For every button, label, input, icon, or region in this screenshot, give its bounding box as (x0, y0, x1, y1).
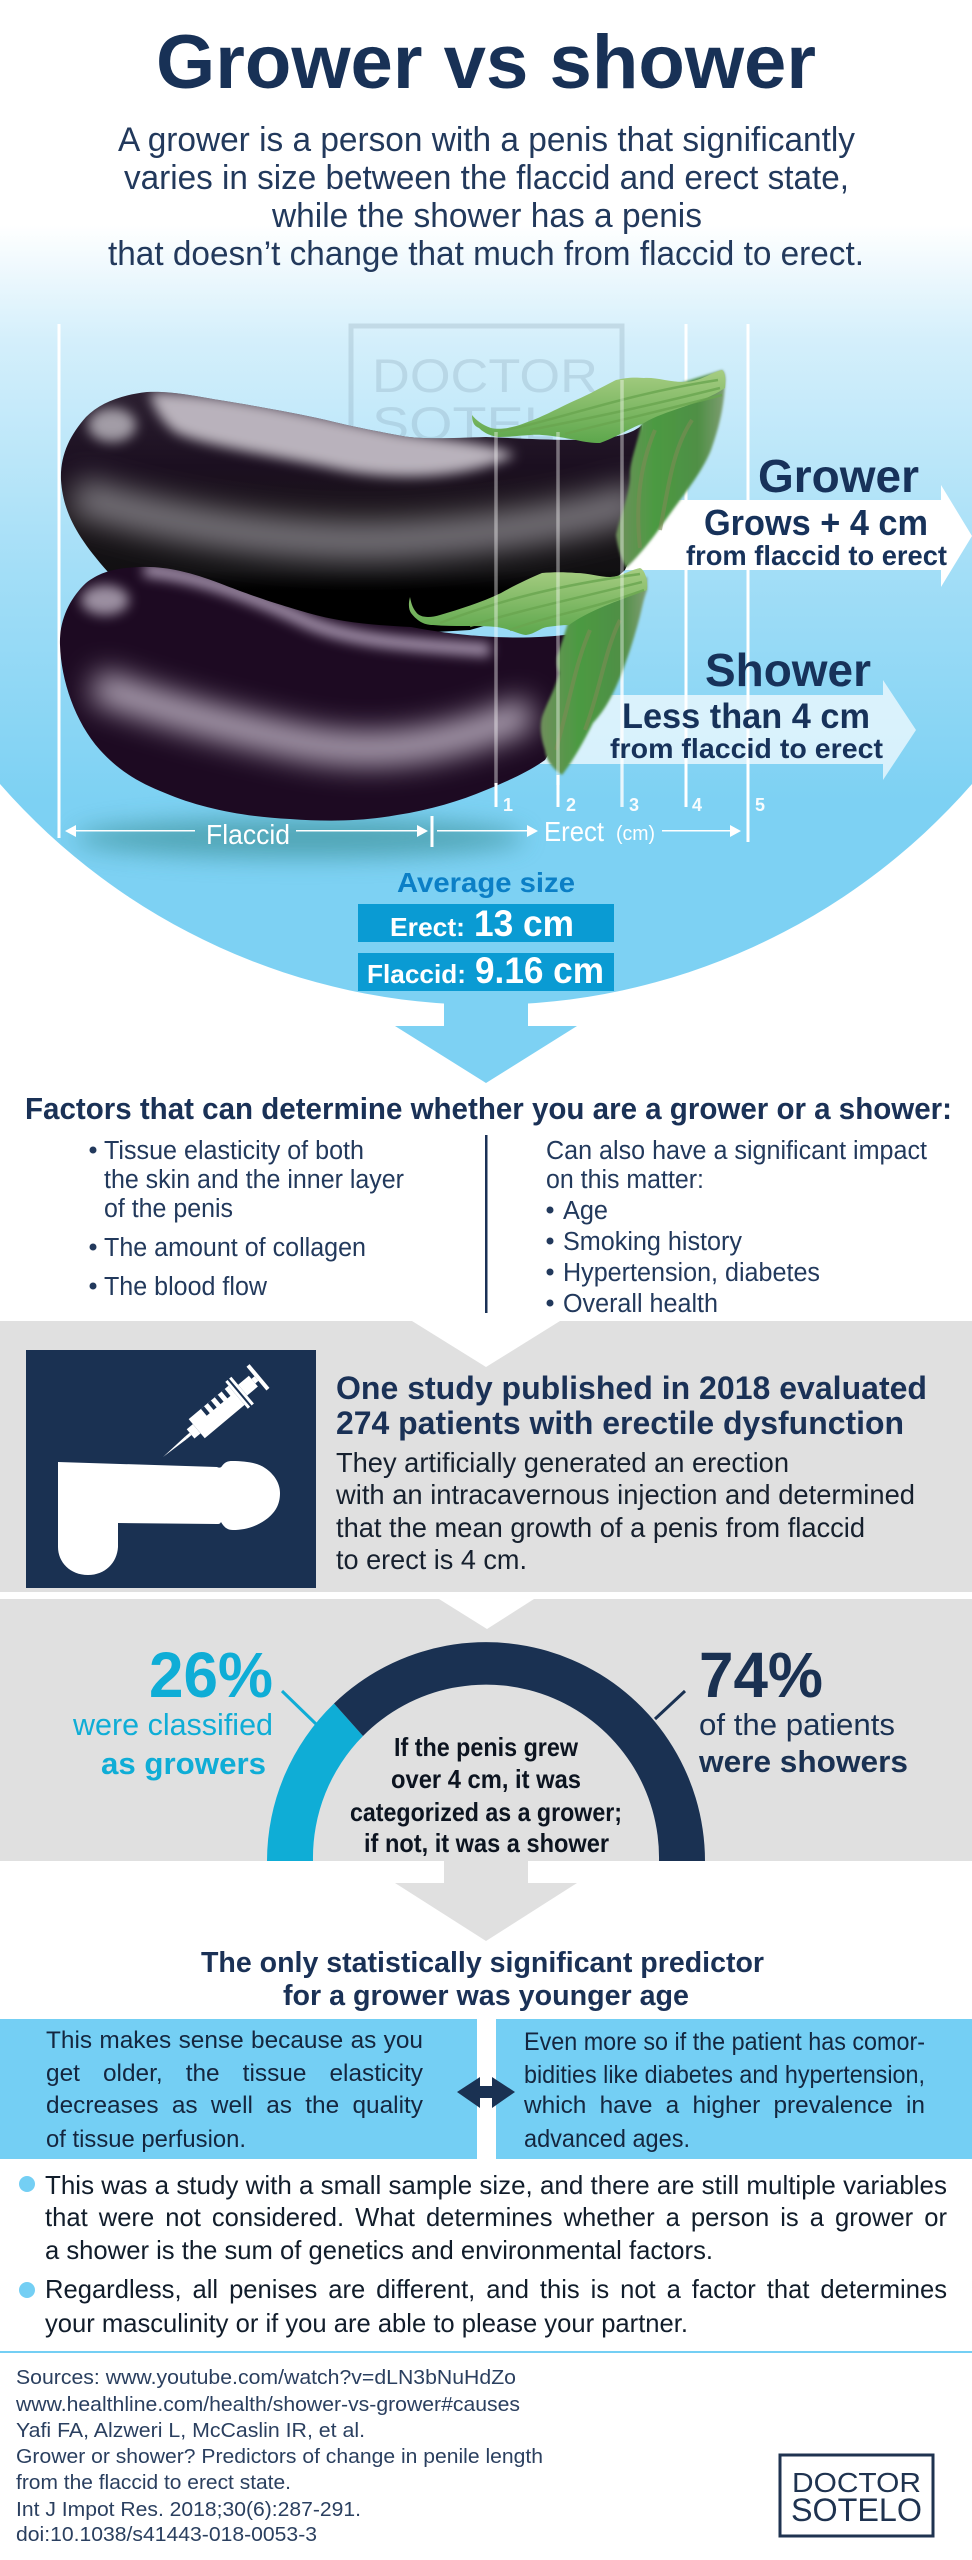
sources: www.healthline.com/health/shower-vs-grower#causes (15, 2393, 520, 2416)
arrow: shower (540, 680, 916, 780)
note: small sample size: a shower is the sum of genetics and environmental factors. (45, 2237, 713, 2265)
stat: 74 percent showers: were showers (698, 1744, 908, 1779)
watermark logo: DOCTOR (372, 349, 598, 402)
donut centre text: categorized as a grower; (350, 1797, 622, 1827)
panel: right explanation box: bidities like diabetes and hypertension, (524, 2061, 925, 2089)
label: shower (610, 644, 883, 764)
factors: left list: The blood flow (104, 1273, 268, 1301)
icon: penis silhouette (58, 1461, 280, 1575)
label: grower: from flaccid to erect (686, 540, 947, 571)
ruler: lines crossing the eggplants (496, 380, 622, 807)
predictor heading: for a grower was younger age (283, 1980, 689, 2012)
panel: right explanation box: Even more so if the patient has comor- (524, 2028, 925, 2056)
donut centre text: If the penis grew (394, 1732, 579, 1762)
ruler numbers: 4 (692, 795, 702, 815)
watermark logo (351, 326, 622, 471)
stat: 26 percent growers: 26% (149, 1639, 273, 1711)
arrow: down from hero (395, 1000, 577, 1083)
factors: right list: Hypertension, diabetes (563, 1259, 820, 1287)
average size: erect: 13 cm (474, 903, 574, 944)
study heading (336, 1370, 927, 1441)
sources (15, 2366, 543, 2546)
label: shower: Shower (705, 644, 871, 696)
label: grower (686, 450, 947, 571)
panel: right explanation box: advanced ages. (524, 2125, 690, 2153)
label: shower: from flaccid to erect (610, 733, 883, 764)
ruler numbers: 2 (566, 795, 576, 815)
panel: left explanation box: decreases as well as the quality (46, 2092, 423, 2119)
stat: 26 percent growers: as growers (101, 1746, 266, 1781)
average size heading: Average size (397, 867, 575, 898)
sources: doi:10.1038/s41443-018-0053-3 (16, 2523, 317, 2546)
average size: flaccid: Flaccid: (367, 959, 466, 989)
stat: 74 percent showers: of the patients (699, 1707, 895, 1742)
stat: 26 percent growers: were classified (72, 1707, 273, 1742)
icon: syringe injection (26, 1350, 316, 1588)
ruler labels: flaccid and erect: (cm) (616, 823, 655, 845)
arrow: grey down (395, 1861, 577, 1941)
average size: flaccid: 9.16 cm (475, 950, 604, 991)
ruler labels: flaccid and erect (65, 816, 741, 850)
title: Grower vs shower (156, 20, 816, 105)
logo (780, 2455, 933, 2536)
study body text: to erect is 4 cm. (336, 1544, 527, 1575)
factors: left list: Tissue elasticity of both (104, 1137, 364, 1165)
average size: erect: Erect: (390, 912, 465, 942)
panel: results background (0, 1599, 972, 1861)
footer divider (0, 2351, 972, 2353)
study body text: with an intracavernous injection and determined (335, 1479, 915, 1510)
intro text block: varies in size between the flaccid and erect state, (124, 159, 849, 197)
sources: Yafi FA, Alzweri L, McCaslin IR, et al. (16, 2419, 365, 2442)
stat: 26 percent growers (72, 1639, 273, 1781)
factors: right list: Overall health (563, 1290, 718, 1318)
illustration: lower eggplant calyx (409, 568, 647, 775)
intro text block (108, 121, 864, 273)
donut centre text: if not, it was a shower (364, 1828, 609, 1858)
stat: 74 percent showers: 74% (699, 1639, 823, 1711)
sources: Grower or shower? Predictors of change in penile length (16, 2445, 543, 2468)
note: small sample size (19, 2172, 947, 2265)
factors: right list: Age (563, 1197, 608, 1225)
factors: right list: on this matter: (546, 1166, 704, 1194)
ruler: vertical scale lines (59, 324, 748, 847)
ruler numbers: 1 (503, 795, 513, 815)
study body text: that the mean growth of a penis from flaccid (336, 1512, 865, 1543)
intro text block: while the shower has a penis (271, 197, 702, 235)
note: all penises are different (19, 2274, 947, 2338)
sources: Int J Impot Res. 2018;30(6):287-291. (16, 2498, 361, 2521)
illustration: upper eggplant calyx (472, 370, 725, 568)
factors: right list (546, 1137, 927, 1318)
panel: left explanation box: of tissue perfusion. (46, 2126, 246, 2153)
sources: from the flaccid to erect state. (16, 2471, 291, 2494)
study body text: They artificially generated an erection (336, 1447, 789, 1478)
logo: DOCTOR (792, 2467, 921, 2498)
ruler numbers: 5 (755, 795, 765, 815)
arrow: grower (590, 485, 972, 587)
factors: right list: Smoking history (563, 1228, 742, 1256)
factors: left list: of the penis (104, 1195, 233, 1223)
panel: right explanation box (496, 2019, 972, 2159)
note: all penises are different: your masculinity or if you are able to please your partner. (45, 2310, 688, 2338)
predictor heading (201, 1947, 764, 2012)
logo: SOTELO (791, 2492, 922, 2528)
average size: flaccid (358, 950, 614, 991)
study body text (335, 1447, 915, 1575)
panel: study background (0, 1321, 972, 1592)
ruler labels: flaccid and erect: Flaccid (206, 819, 290, 850)
label: shower: Less than 4 cm (622, 697, 870, 736)
panel: right explanation box: which have a higher prevalence in (524, 2092, 925, 2119)
factors: left list: the skin and the inner layer (104, 1166, 404, 1194)
intro text block: that doesn’t change that much from flaccid to erect. (108, 235, 864, 273)
predictor heading: The only statistically significant predictor (201, 1947, 764, 1979)
sources: Sources: www.youtube.com/watch?v=dLN3bNuHdZo (16, 2366, 516, 2389)
note: small sample size: This was a study with a small sample size, and there are still multiple variables (45, 2172, 947, 2200)
factors: left list (90, 1137, 404, 1301)
factors: column divider (485, 1135, 488, 1313)
ruler numbers (503, 795, 765, 815)
study heading: One study published in 2018 evaluated (336, 1370, 927, 1406)
factors heading: Factors that can determine whether you are a grower or a shower: (25, 1091, 952, 1126)
panel: left explanation box: This makes sense because as you (46, 2027, 423, 2054)
panel: left explanation box: get older, the tissue elasticity (46, 2060, 423, 2087)
factors: left list: The amount of collagen (104, 1234, 366, 1262)
note: small sample size: that were not considered. What determines whether a person is a grower or (45, 2204, 947, 2232)
donut centre text (350, 1732, 622, 1858)
donut centre text: over 4 cm, it was (391, 1764, 581, 1794)
study heading: 274 patients with erectile dysfunction (336, 1405, 904, 1441)
panel: blue gradient hero background (0, 0, 972, 1005)
label: grower: Grower (758, 450, 919, 502)
watermark logo: SOTELO (372, 397, 598, 450)
illustration: lower eggplant (shower) (60, 567, 586, 821)
illustration: upper eggplant (grower) (61, 392, 642, 640)
intro text block: A grower is a person with a penis that significantly (118, 121, 855, 159)
ground shadow (75, 818, 525, 858)
donut chart (267, 1642, 705, 1861)
ruler labels: flaccid and erect: Erect (544, 816, 604, 847)
stat: 74 percent showers (698, 1639, 908, 1779)
factors: right list: Can also have a significant impact (546, 1137, 927, 1165)
average size: erect (358, 903, 614, 944)
panel: left explanation box (0, 2019, 477, 2159)
icon: double-headed arrow (457, 2077, 515, 2108)
label: grower: Grows + 4 cm (704, 502, 928, 543)
note: all penises are different: Regardless, all penises are different, and this is not a factor that determines (45, 2276, 947, 2304)
ruler numbers: 3 (629, 795, 639, 815)
